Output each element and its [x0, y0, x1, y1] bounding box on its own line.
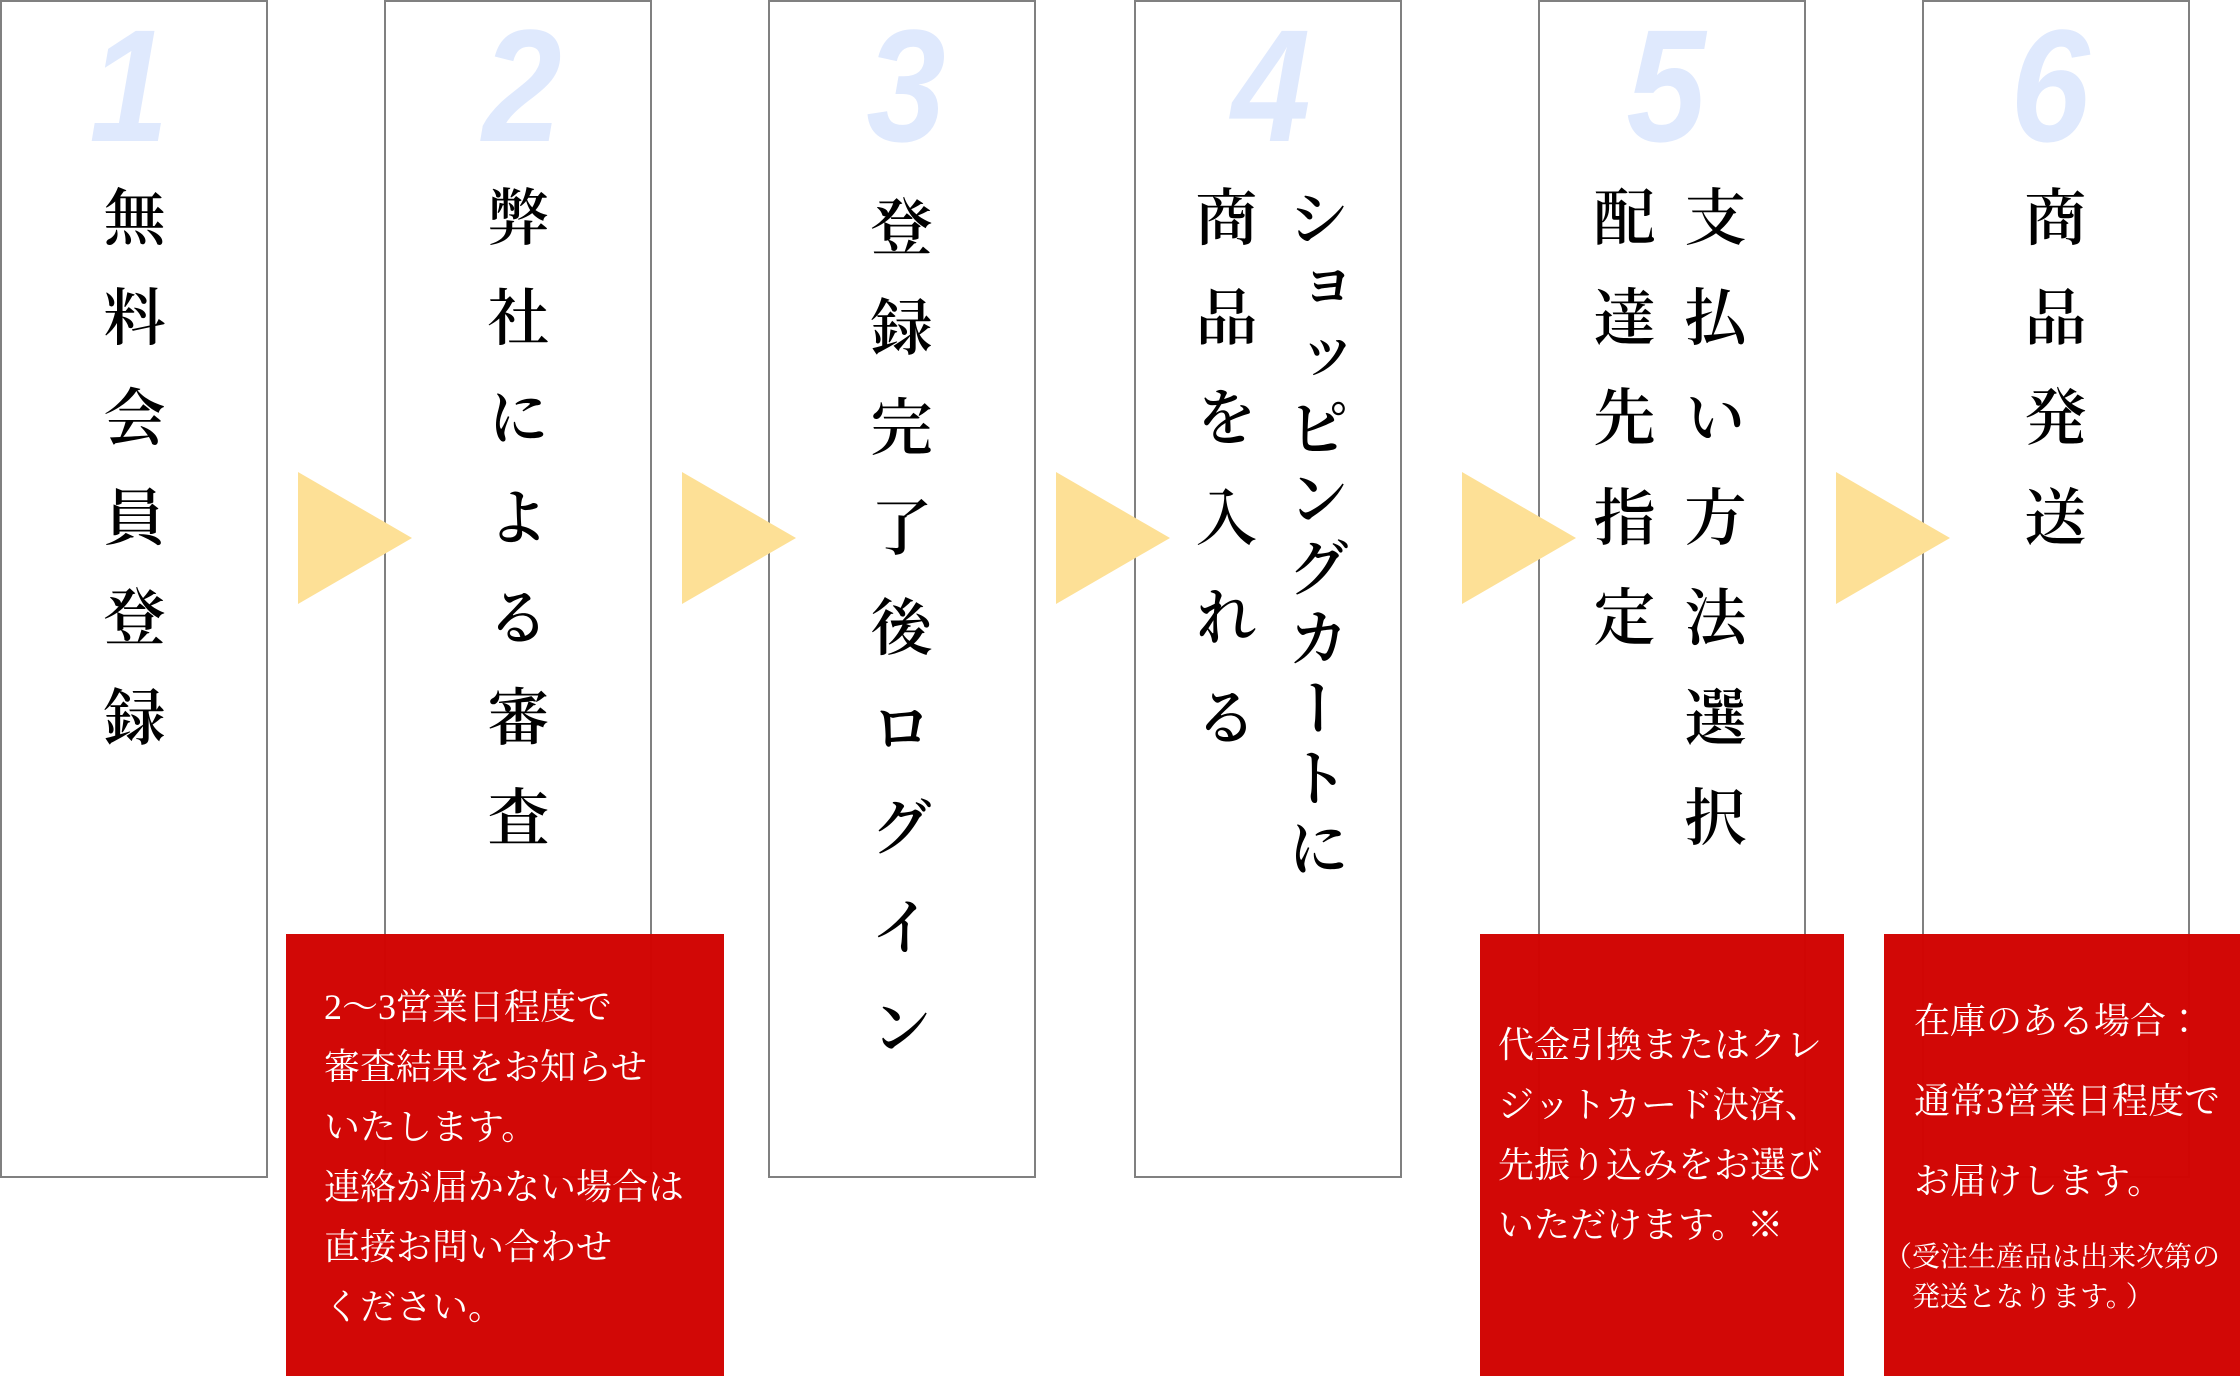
- step 6 title: 商品発送: [2015, 185, 2083, 585]
- callout text line 6: ください。: [324, 1287, 504, 1327]
- step 5 title first column: 支払い方法選択: [1675, 185, 1743, 885]
- number 5: 5: [1626, 0, 1706, 175]
- arrow 3 to 4: [1056, 472, 1170, 604]
- callout text line 1: 代金引換またはクレ: [1498, 1025, 1822, 1065]
- panel: step 4: [1134, 0, 1402, 1178]
- panel: step 1: [0, 0, 268, 1178]
- callout text line 5: 直接お問い合わせ: [324, 1227, 612, 1267]
- callout: shipping note: [1884, 934, 2240, 1376]
- callout text line 3: 先振り込みをお選び: [1498, 1145, 1822, 1185]
- callout text line 2: 通常3営業日程度で: [1914, 1081, 2220, 1121]
- callout text line 2: 審査結果をお知らせ: [324, 1047, 647, 1087]
- step 4 title second column: 商品を入れる: [1186, 185, 1254, 785]
- arrow 1 to 2: [298, 472, 412, 604]
- callout small text line 2: 発送となります。）: [1912, 1282, 2154, 1313]
- step 2 title: 弊社による審査: [478, 185, 546, 885]
- panel: step 2: [384, 0, 652, 1178]
- callout text line 1: 2〜3営業日程度で: [324, 987, 612, 1027]
- callout text line 4: いただけます。※: [1498, 1205, 1783, 1245]
- panel: step 3: [768, 0, 1036, 1178]
- callout text line 3: お届けします。: [1914, 1161, 2163, 1201]
- step 1 title: 無料会員登録: [94, 185, 162, 785]
- step 5 title second column: 配達先指定: [1584, 185, 1652, 685]
- callout: review note: [286, 934, 724, 1376]
- callout small text line 1: （受注生産品は出来次第の: [1884, 1242, 2220, 1273]
- callout text line 1: 在庫のある場合：: [1914, 1001, 2202, 1041]
- callout: payment note: [1480, 934, 1844, 1376]
- panel: step 5: [1538, 0, 1806, 1178]
- number 2: 2: [482, 0, 562, 175]
- callout text line 3: いたします。: [324, 1107, 537, 1147]
- number 6: 6: [2010, 0, 2090, 175]
- panel: step 6: [1922, 0, 2190, 1178]
- number 1: 1: [89, 0, 169, 175]
- number 4: 4: [1231, 0, 1311, 175]
- number 3: 3: [866, 0, 946, 175]
- arrow 2 to 3: [682, 472, 796, 604]
- arrow 5 to 6: [1836, 472, 1950, 604]
- step 4 title first column: ショッピングカートに: [1278, 186, 1346, 886]
- step 3 title: 登録完了後ログイン: [861, 195, 929, 1095]
- callout text line 2: ジットカード決済、: [1498, 1085, 1821, 1125]
- arrow 4 to 5: [1462, 472, 1576, 604]
- callout text line 4: 連絡が届かない場合は: [324, 1167, 684, 1207]
